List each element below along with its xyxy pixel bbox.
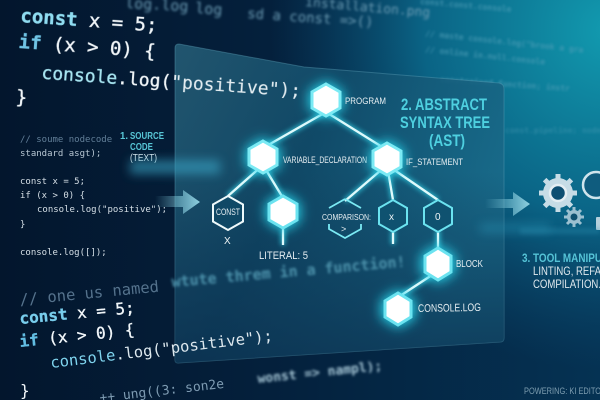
blurred code in panel xyxy=(171,253,406,387)
code block: large bottom: console.log("positive"); xyxy=(49,327,274,372)
code block: small middle: const x = 5; xyxy=(20,177,85,187)
node: 0 xyxy=(424,200,452,232)
source code label xyxy=(120,131,164,164)
node: program xyxy=(309,81,386,119)
icon: ring xyxy=(583,172,600,198)
code block: large top xyxy=(14,5,306,128)
code block: small middle: console.log([]); xyxy=(20,248,107,258)
node: const: CONST xyxy=(216,207,240,217)
node: block xyxy=(421,245,483,283)
node: comparison xyxy=(322,199,371,238)
code block: large bottom: } xyxy=(20,381,30,400)
heading: abstract syntax tree xyxy=(400,95,490,150)
icon: small gear xyxy=(564,207,584,227)
node: literal xyxy=(259,193,308,262)
code block: small middle: if (x > 0) { xyxy=(20,191,85,201)
node: comparison: COMPARISON: xyxy=(322,212,371,222)
code block: large top: console.log("positive"); xyxy=(41,63,302,102)
blurred code background at the top xyxy=(125,0,431,31)
heading: abstract syntax tree: 2. ABSTRACT xyxy=(401,95,487,114)
node: block: BLOCK xyxy=(456,259,483,270)
left arrow xyxy=(130,160,220,214)
code block: large bottom: const x = 5; xyxy=(19,298,135,328)
source code label: 1. xyxy=(120,131,128,142)
node: variable declaration: VARIABLE_DECLARATION xyxy=(283,155,367,165)
blurred code background at the upper right xyxy=(420,0,600,135)
node: comparison: > xyxy=(341,224,346,234)
tool manipulation label xyxy=(522,253,600,291)
node: console.log xyxy=(381,290,481,328)
heading: abstract syntax tree: SYNTAX TREE xyxy=(400,113,490,132)
source code label: SOURCE xyxy=(130,131,164,142)
node: program: PROGRAM xyxy=(345,96,386,106)
node: variable declaration xyxy=(246,138,367,176)
heading: abstract syntax tree: (AST) xyxy=(429,131,465,150)
node: literal: LITERAL: 5 xyxy=(259,250,308,262)
code block: small middle: } xyxy=(20,220,25,230)
blurred code in panel: wtute threm in a function! xyxy=(171,253,406,291)
blurred code background at the top: sd a const =>() xyxy=(247,6,374,31)
source code label: (TEXT) xyxy=(130,153,157,164)
node: console.log: CONSOLE.LOG xyxy=(418,302,481,315)
glow under icons xyxy=(520,228,600,234)
node: const xyxy=(213,196,243,247)
node: x: x xyxy=(389,212,394,223)
icon: lock xyxy=(596,217,600,230)
code block: large bottom: // one us named xyxy=(19,278,160,309)
AST edges xyxy=(228,112,438,296)
blurred code background at the upper right: // maste console.log("brook a gra xyxy=(425,29,584,55)
code block: small middle xyxy=(20,135,167,258)
node: x xyxy=(379,200,407,232)
code block: large top: if (x > 0) { xyxy=(18,31,156,63)
code block: small middle: console.log("positive"); xyxy=(37,205,167,215)
source code label: CODE xyxy=(130,142,153,153)
node: const: X xyxy=(224,236,231,247)
right arrow xyxy=(480,192,550,232)
code block: large bottom xyxy=(18,278,274,400)
node: if statement xyxy=(370,140,463,178)
blurred code background at the upper right: constrained.function; instr xyxy=(440,74,570,93)
code block: small middle: standard asgt); xyxy=(20,149,101,159)
blurred code background at the upper right: // online in.null.console xyxy=(425,44,546,67)
blurred code in panel: wonst => nampl); xyxy=(257,359,383,387)
code block: large top: } xyxy=(15,86,28,109)
code block: small middle: // soume nodecode xyxy=(20,135,112,145)
code block: large top: const x = 5; xyxy=(20,5,158,37)
glass panel xyxy=(175,44,504,363)
code line crossing top of panel: console.log("positive"); xyxy=(41,63,302,102)
icon: large gear xyxy=(539,174,577,212)
node: 0: 0 xyxy=(435,212,441,223)
code block: large bottom: if (x > 0) { xyxy=(18,320,135,351)
node: if statement: IF_STATEMENT xyxy=(406,157,463,167)
